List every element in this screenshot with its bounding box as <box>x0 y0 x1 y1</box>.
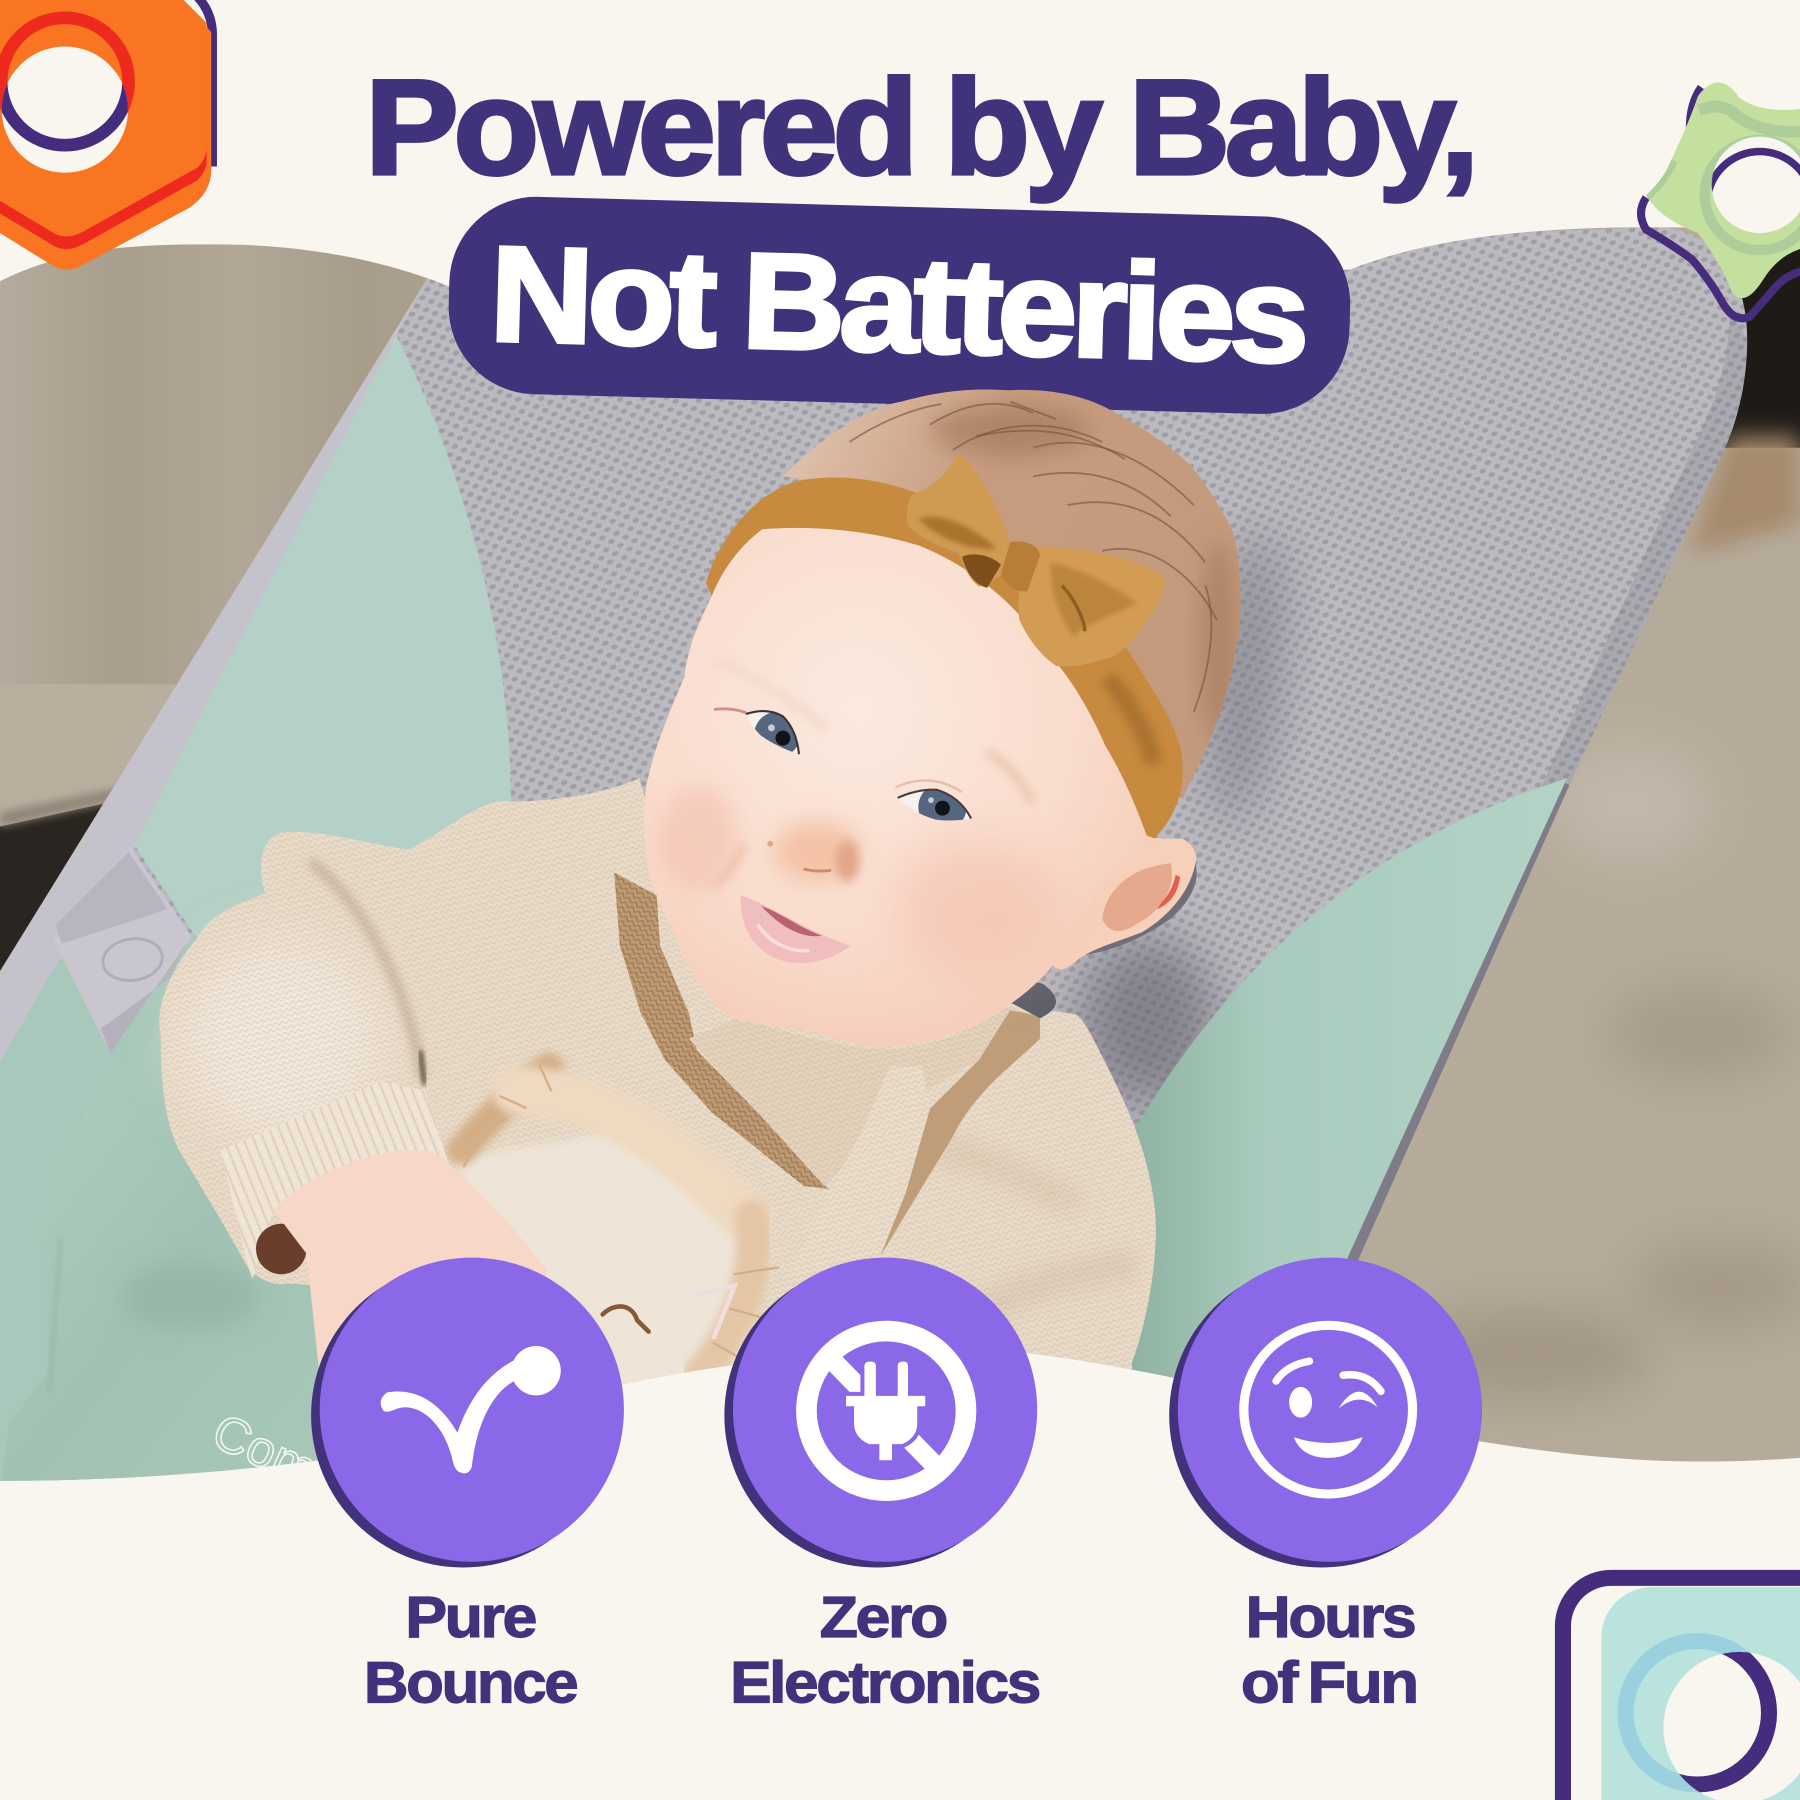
turtleneck collar <box>689 1007 1040 1186</box>
sofa background <box>0 230 482 976</box>
sweater chest panel <box>453 1125 746 1401</box>
fringe <box>461 1065 778 1375</box>
label: Zero Electronics: Electronics <box>730 1650 1040 1715</box>
right eye <box>895 780 971 831</box>
smile crease <box>714 844 744 886</box>
label: Pure Bounce: Pure <box>405 1585 536 1650</box>
baby hand and arm <box>273 1150 551 1446</box>
logo text on cushion: Comfort <box>204 1402 392 1527</box>
decoration: green star teether <box>1641 82 1800 318</box>
photo background: room and bouncer seat <box>0 218 1800 1527</box>
sleeve shading <box>310 861 422 1079</box>
mint right seat panel <box>1132 778 1567 1378</box>
icon: bounce arc with ball <box>381 1346 561 1473</box>
decoration: orange hexagon teether <box>0 0 212 270</box>
label: Hours of Fun <box>1241 1585 1417 1715</box>
left eye <box>714 709 800 758</box>
baby ear <box>1053 838 1196 969</box>
brow shading <box>714 660 827 729</box>
baby hair <box>783 390 1241 799</box>
icon: winking face <box>1244 1325 1413 1494</box>
photo: baby in knit sweater <box>159 390 1241 1492</box>
label: Hours of Fun: of Fun <box>1241 1650 1417 1715</box>
baby sweater body <box>159 778 1156 1384</box>
title: Powered by Baby,: Powered by Baby, <box>365 51 1474 203</box>
badge: Hours of Fun <box>1169 1258 1482 1568</box>
mint upper-left seat panel <box>134 336 511 938</box>
mouth <box>740 895 851 963</box>
ear shadow on seat <box>1085 861 1197 955</box>
label: Pure Bounce <box>364 1585 577 1715</box>
mint cushion <box>2 1240 318 1481</box>
right collar tan fold <box>880 1010 1040 1256</box>
front strap of sweater <box>791 1066 930 1275</box>
badge: Pure Bounce <box>311 1258 624 1568</box>
badge: Zero Electronics <box>724 1258 1037 1568</box>
left collar tan stripe <box>614 872 829 1189</box>
decoration: mint square teether <box>1563 1578 1800 1800</box>
bouncer mesh seat <box>0 227 1747 1492</box>
heading pill: Not Batteries <box>446 194 1353 416</box>
baby face <box>644 528 1154 1048</box>
mint lower seat <box>0 937 194 1481</box>
label: Zero Electronics <box>730 1585 1040 1715</box>
dark seat strap at collar <box>1008 983 1056 1018</box>
label: Pure Bounce: Bounce <box>364 1650 577 1715</box>
harness buckle <box>55 847 192 1054</box>
seat edge strap <box>1352 783 1565 1260</box>
nose <box>767 822 861 882</box>
icon: crossed-out plug <box>806 1331 966 1491</box>
heading pill: Not Batteries: Not Batteries <box>488 217 1306 391</box>
baby headband <box>706 455 1183 838</box>
rug and floor background <box>1148 218 1800 1492</box>
label: Hours of Fun: Hours <box>1246 1585 1415 1650</box>
hair bow <box>907 455 1165 666</box>
sleeve cuff <box>220 1081 449 1283</box>
label: Zero Electronics: Zero <box>820 1585 946 1650</box>
